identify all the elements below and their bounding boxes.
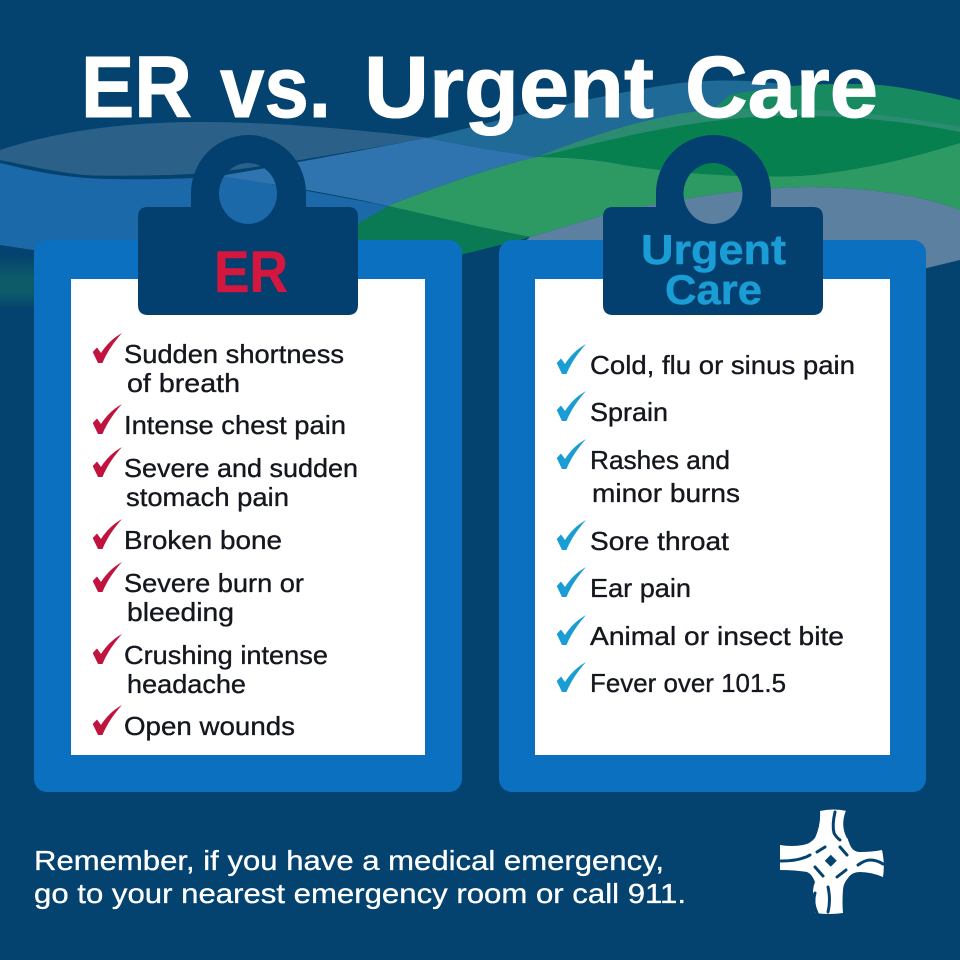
checklist [93, 333, 358, 741]
item: Cold, flu or sinus pain: Cold, flu or sinus pain [590, 350, 855, 380]
clip [138, 135, 358, 315]
footer message: Remember, if you have a medical emergency, [34, 845, 664, 876]
item: Open wounds [93, 705, 295, 741]
clipboard board [34, 240, 462, 792]
item: Sudden shortness of breath: Sudden shortness [124, 339, 344, 369]
item: Sore throat: Sore throat [590, 526, 730, 556]
clip label: Care [665, 266, 762, 313]
item: Severe and sudden stomach pain [93, 447, 358, 512]
clip label: ER [214, 240, 288, 305]
item: Sudden shortness of breath: of breath [127, 368, 240, 398]
item: Cold, flu or sinus pain [557, 344, 855, 380]
footer message: go to your nearest emergency room or call 911. [34, 878, 686, 909]
title: vs. [220, 39, 331, 136]
item: Sudden shortness of breath [93, 333, 344, 398]
item: Rashes and minor burns [557, 439, 740, 508]
paper [71, 279, 425, 755]
panel: ER clipboard [34, 135, 462, 792]
item: Severe burn or bleeding: bleeding [127, 597, 234, 627]
item: Broken bone: Broken bone [124, 525, 282, 555]
item: Sprain: Sprain [590, 397, 668, 427]
footer message [34, 845, 686, 909]
title: Care [685, 39, 878, 136]
item: Intense chest pain: Intense chest pain [124, 410, 346, 440]
item: Crushing intense headache: Crushing intense [124, 640, 328, 670]
item: Crushing intense headache: headache [127, 669, 246, 699]
clip label: Urgent [641, 226, 786, 273]
item: Severe and sudden stomach pain: stomach pain [126, 482, 289, 512]
icon: hospital cross logo [780, 810, 884, 914]
item: Severe burn or bleeding [93, 562, 304, 627]
item: Animal or insect bite: Animal or insect bite [590, 621, 844, 651]
clipboard board [499, 240, 926, 792]
item: Intense chest pain [93, 404, 346, 440]
panel: Urgent Care clipboard [499, 135, 926, 792]
item: Crushing intense headache [93, 634, 328, 699]
title: ER [81, 39, 192, 136]
paper [535, 279, 890, 755]
item: Fever over 101.5: Fever over 101.5 [590, 668, 786, 698]
item: Sprain [557, 391, 668, 427]
clip label [641, 226, 786, 313]
item: Ear pain: Ear pain [590, 573, 691, 603]
title [81, 39, 878, 136]
item: Broken bone [93, 519, 282, 555]
title: Urgent [364, 39, 654, 136]
item: Animal or insect bite [557, 615, 844, 651]
checklist [557, 344, 855, 698]
item: Rashes and minor burns: Rashes and [590, 445, 730, 475]
item: Ear pain [557, 567, 691, 603]
item: Rashes and minor burns: minor burns [592, 478, 740, 508]
clip [603, 135, 823, 315]
item: Sore throat [557, 520, 730, 556]
item: Open wounds: Open wounds [124, 711, 295, 741]
background waves [0, 81, 960, 310]
item: Severe burn or bleeding: Severe burn or [124, 568, 304, 598]
item: Severe and sudden stomach pain: Severe and sudden [124, 453, 358, 483]
